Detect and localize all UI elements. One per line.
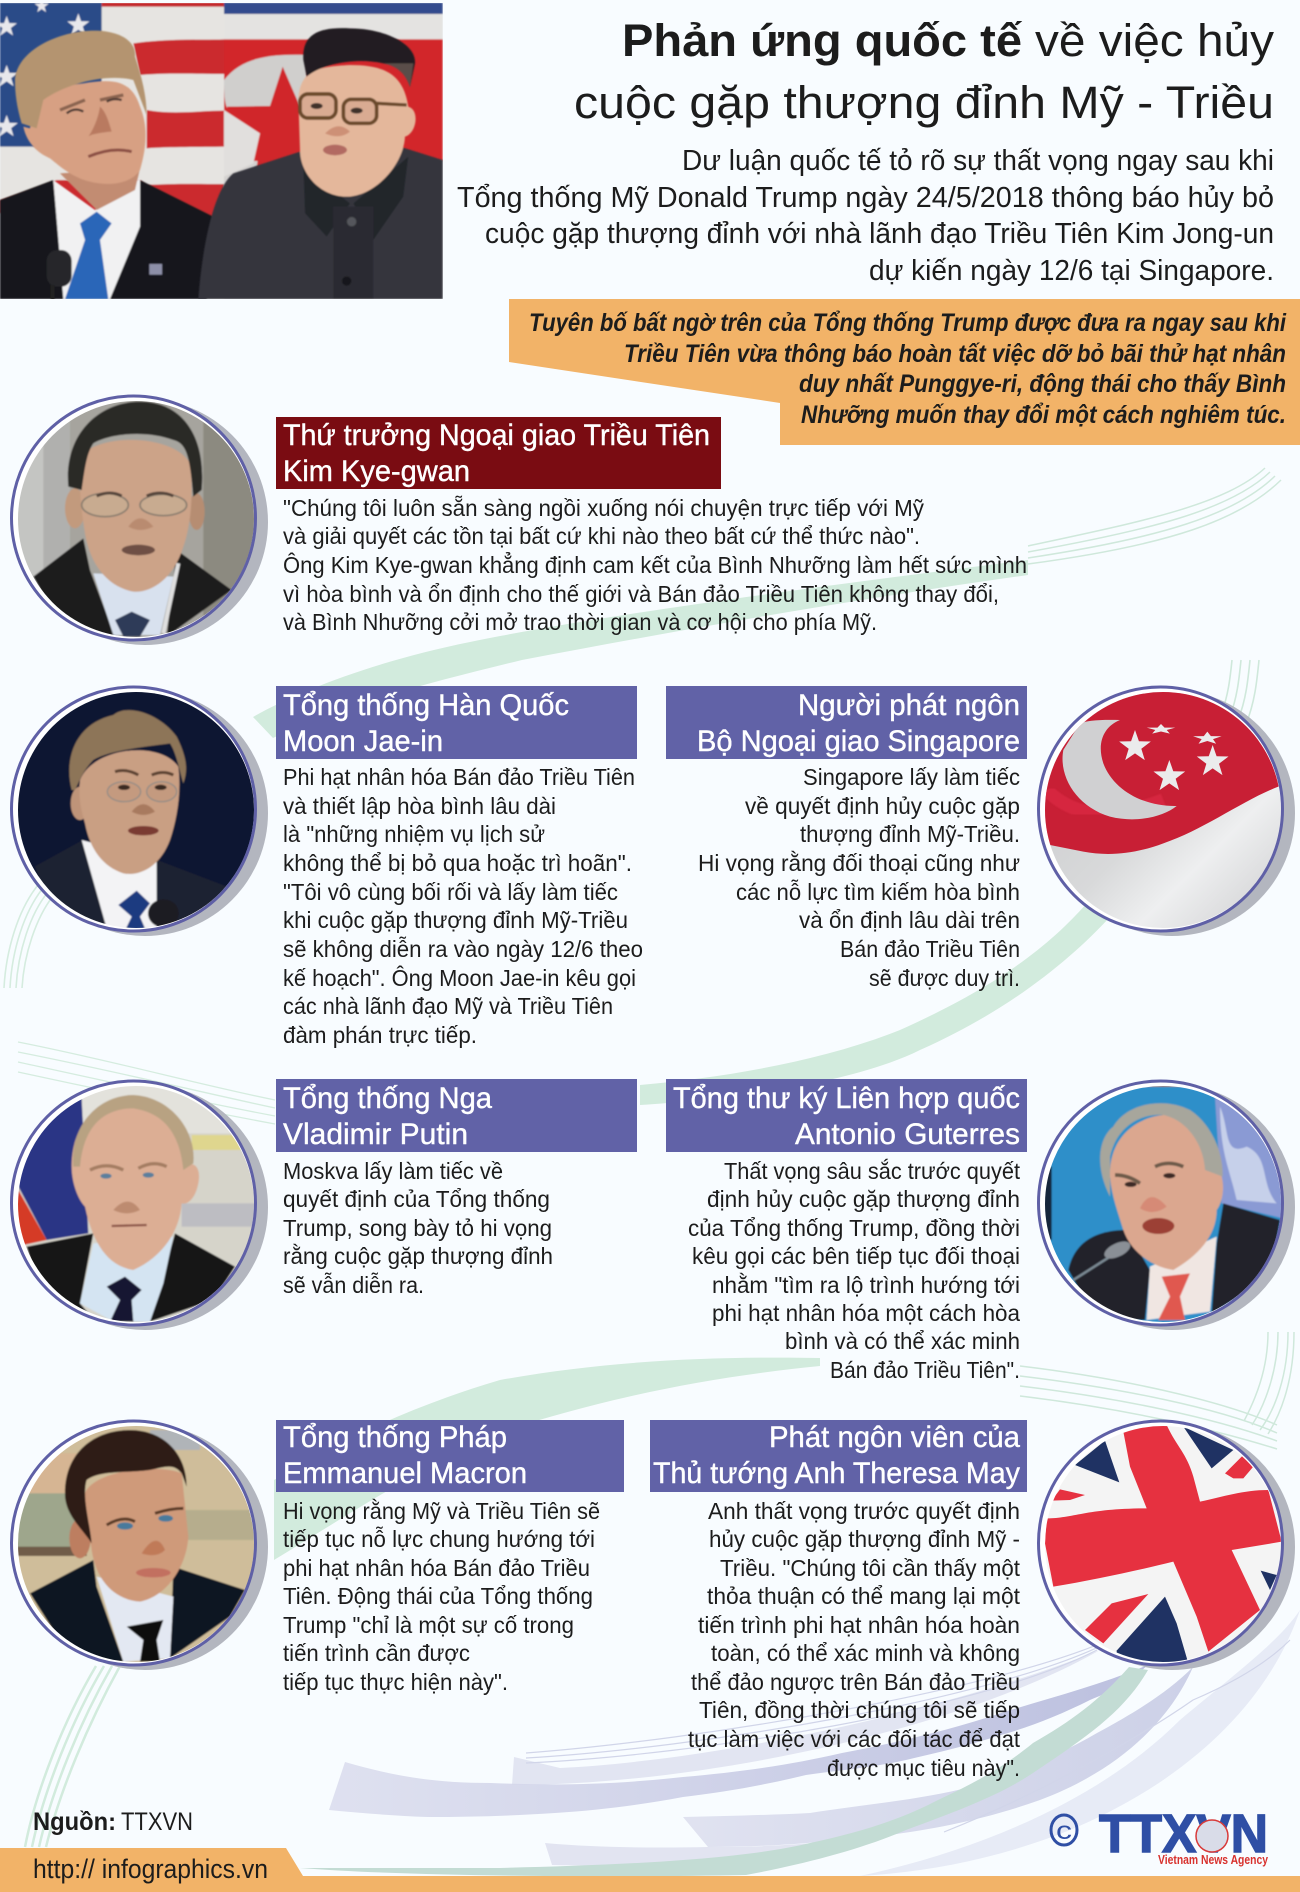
heading: Moon Jae-in — [276, 686, 637, 759]
text: Singapore statement: các nỗ lực tìm kiếm hòa bình — [736, 879, 1020, 905]
heading: Emmanuel Macron: Tổng thống Pháp — [283, 1421, 507, 1454]
heading: Vladimir Putin — [276, 1079, 637, 1152]
icon: UK flag — [1038, 1420, 1295, 1670]
text: Moon Jae-in statement: đàm phán trực tiếp. — [283, 1022, 477, 1048]
text: Singapore statement: về quyết định hủy cuộc gặp — [745, 793, 1020, 819]
heading: Emmanuel Macron — [276, 1420, 624, 1492]
text: Vladimir Putin statement: sẽ vẫn diễn ra. — [283, 1272, 424, 1298]
text: Moon Jae-in statement: khi cuộc gặp thượng đỉnh Mỹ-Triều — [283, 907, 628, 933]
title: Phản ứng quốc tế — [622, 15, 1023, 66]
portrait: Antonio Guterres — [1038, 1080, 1295, 1330]
intro text: Tổng thống Mỹ Donald Trump ngày 24/5/2018 thông báo hủy bỏ — [457, 182, 1274, 214]
text: Singapore statement: sẽ được duy trì. — [869, 965, 1020, 991]
text: Singapore statement: và ổn định lâu dài trên — [799, 907, 1020, 933]
text: Singapore statement: thượng đỉnh Mỹ-Triều. — [800, 821, 1020, 847]
text: Kim Kye-gwan statement — [283, 494, 1027, 635]
text: Singapore statement: Hi vọng rằng đối thoại cũng như — [698, 850, 1020, 876]
source: Nguồn: — [33, 1808, 116, 1836]
text: Kim Kye-gwan statement: "Chúng tôi luôn sẵn sàng ngồi xuống nói chuyện trực tiếp với Mỹ — [283, 494, 924, 521]
heading: Theresa May spokesperson: Thủ tướng Anh Theresa May — [653, 1457, 1020, 1490]
text: Moon Jae-in statement: là "những nhiệm vụ lịch sử — [283, 821, 545, 847]
text: Emmanuel Macron statement: Tiên. Động thái của Tổng thống — [283, 1583, 593, 1609]
text: Antonio Guterres statement: định hủy cuộc gặp thượng đỉnh — [707, 1186, 1020, 1212]
heading: Antonio Guterres: Tổng thư ký Liên hợp quốc — [673, 1082, 1020, 1115]
text: UK statement: thỏa thuận có thể mang lại một — [707, 1583, 1020, 1609]
heading: Kim Kye-gwan: Thứ trưởng Ngoại giao Triều Tiên — [283, 419, 710, 452]
text: Singapore statement — [698, 764, 1020, 991]
text: Vladimir Putin statement: quyết định của Tổng thống — [283, 1186, 550, 1212]
text: UK statement: tiến trình phi hạt nhân hóa hoàn — [698, 1612, 1020, 1638]
heading: Theresa May spokesperson: Phát ngôn viên của — [769, 1421, 1020, 1454]
header photo: Donald Trump and Kim Jong-un — [0, 0, 443, 300]
text: Emmanuel Macron statement: tiếp tục thực hiện này". — [283, 1669, 508, 1695]
heading: Kim Kye-gwan: Kim Kye-gwan — [283, 455, 470, 488]
source: TTXVN — [121, 1808, 193, 1836]
text: Vladimir Putin statement: rằng cuộc gặp thượng đỉnh — [283, 1243, 553, 1269]
text: Moon Jae-in statement: kế hoạch". Ông Moon Jae-in kêu gọi — [283, 964, 636, 991]
text: Antonio Guterres statement: kêu gọi các bên tiếp tục đối thoại — [692, 1243, 1020, 1269]
text: Emmanuel Macron statement: tiến trình cần được — [283, 1640, 470, 1666]
text: Moon Jae-in statement: "Tôi vô cùng bối rối và lấy làm tiếc — [283, 879, 618, 905]
heading: Vladimir Putin: Vladimir Putin — [283, 1118, 468, 1151]
heading: Antonio Guterres — [666, 1079, 1027, 1152]
logo: TTXVN: c — [1056, 1817, 1072, 1845]
text: UK statement: Anh thất vọng trước quyết định — [708, 1498, 1020, 1524]
text: Antonio Guterres statement: của Tổng thống Trump, đồng thời — [688, 1215, 1020, 1241]
heading: Singapore spokesperson — [666, 686, 1027, 759]
heading: Moon Jae-in: Tổng thống Hàn Quốc — [283, 689, 569, 722]
heading: Antonio Guterres: Antonio Guterres — [795, 1118, 1020, 1151]
icon: Singapore flag — [1038, 687, 1295, 936]
text: Moon Jae-in statement: các nhà lãnh đạo Mỹ và Triều Tiên — [283, 993, 613, 1019]
text: Singapore statement: Singapore lấy làm tiếc — [803, 764, 1020, 790]
text: UK statement — [688, 1498, 1020, 1781]
text: UK statement: hủy cuộc gặp thượng đỉnh Mỹ - — [709, 1526, 1020, 1552]
text: Emmanuel Macron statement: Hi vọng rằng Mỹ và Triều Tiên sẽ — [283, 1498, 600, 1524]
title: về việc hủy — [1035, 15, 1275, 66]
text: Kim Kye-gwan statement: và giải quyết các tồn tại bất cứ khi nào theo bất cứ thể thức nào". — [283, 523, 920, 549]
text: Vladimir Putin statement: Moskva lấy làm tiếc về — [283, 1158, 503, 1184]
text: Emmanuel Macron statement — [283, 1498, 600, 1695]
text: Singapore statement: Bán đảo Triều Tiên — [840, 936, 1020, 962]
title — [574, 15, 1275, 128]
text: Moon Jae-in statement: Phi hạt nhân hóa Bán đảo Triều Tiên — [283, 764, 635, 790]
text: Kim Kye-gwan statement: Ông Kim Kye-gwan khẳng định cam kết của Bình Nhưỡng làm hết sức mình — [283, 550, 1027, 578]
portrait: Vladimir Putin — [12, 1080, 268, 1330]
portrait: Moon Jae-in — [12, 687, 268, 936]
text: Emmanuel Macron statement: Trump "chỉ là một sự cố trong — [283, 1612, 574, 1638]
footer bar with URL: http:// infographics.vn — [33, 1854, 268, 1884]
text: Antonio Guterres statement — [688, 1158, 1021, 1383]
text: Moon Jae-in statement — [283, 764, 643, 1048]
text: Antonio Guterres statement: phi hạt nhân hóa một cách hòa — [712, 1300, 1021, 1326]
text: Antonio Guterres statement: Thất vọng sâu sắc trước quyết — [724, 1158, 1020, 1184]
logo: TTXVN: TTXVN — [1099, 1804, 1268, 1864]
text: UK statement: tục làm việc với các đối tác để đạt — [688, 1726, 1020, 1752]
figure: Kim Jong-un — [198, 28, 443, 299]
text: UK statement: được mục tiêu này". — [827, 1755, 1020, 1781]
text: Vladimir Putin statement: Trump, song bày tỏ hi vọng — [283, 1215, 552, 1241]
text: UK statement: thể đảo ngược trên Bán đảo Triều — [691, 1669, 1020, 1695]
text: UK statement: Tiên, đồng thời chúng tôi sẽ tiếp — [699, 1697, 1020, 1723]
heading: Singapore spokesperson: Người phát ngôn — [798, 689, 1020, 722]
intro text — [457, 145, 1274, 287]
intro text: Dư luận quốc tế tỏ rõ sự thất vọng ngay sau khi — [682, 145, 1274, 177]
heading: Emmanuel Macron: Emmanuel Macron — [283, 1457, 527, 1490]
logo: TTXVN: Vietnam News Agency — [1158, 1852, 1269, 1867]
callout: orange note — [509, 299, 1300, 445]
text: Antonio Guterres statement: nhằm "tìm ra lộ trình hướng tới — [712, 1272, 1020, 1298]
text: Moon Jae-in statement: và thiết lập hòa bình lâu dài — [283, 793, 556, 819]
text: Antonio Guterres statement: Bán đảo Triều Tiên". — [830, 1357, 1020, 1383]
portrait: Emmanuel Macron — [12, 1421, 268, 1670]
text: UK statement: Triều. "Chúng tôi cần thấy một — [720, 1555, 1020, 1581]
heading: Kim Kye-gwan — [276, 417, 721, 489]
text: Antonio Guterres statement: bình và có thể xác minh — [785, 1328, 1020, 1354]
figure: Donald Trump — [0, 31, 213, 300]
heading: Singapore spokesperson: Bộ Ngoại giao Singapore — [697, 725, 1020, 758]
source — [33, 1808, 193, 1836]
intro text: cuộc gặp thượng đỉnh với nhà lãnh đạo Triều Tiên Kim Jong-un — [485, 218, 1274, 250]
text: Vladimir Putin statement — [283, 1158, 553, 1298]
text: Emmanuel Macron statement: phi hạt nhân hóa Bán đảo Triều — [283, 1555, 590, 1581]
text: Kim Kye-gwan statement: vì hòa bình và ổn định cho thế giới và Bán đảo Triều Tiên không thay đổi, — [283, 581, 999, 607]
heading: Theresa May spokesperson — [650, 1420, 1027, 1492]
portrait: Kim Kye-gwan — [12, 396, 268, 645]
text: UK statement: toàn, có thể xác minh và không — [711, 1640, 1020, 1666]
title: cuộc gặp thượng đỉnh Mỹ - Triều — [574, 77, 1274, 128]
text: Moon Jae-in statement: không thể bị bỏ qua hoặc trì hoãn". — [283, 850, 632, 876]
intro text: dự kiến ngày 12/6 tại Singapore. — [869, 255, 1274, 287]
text: Moon Jae-in statement: sẽ không diễn ra vào ngày 12/6 theo — [283, 936, 643, 962]
heading: Moon Jae-in: Moon Jae-in — [283, 725, 443, 758]
footer bar with URL — [0, 1848, 1300, 1892]
text: Emmanuel Macron statement: tiếp tục nỗ lực chung hướng tới — [283, 1526, 595, 1552]
background swooshes — [4, 468, 1300, 1876]
text: Kim Kye-gwan statement: và Bình Nhưỡng cởi mở trao thời gian và cơ hội cho phía Mỹ. — [283, 609, 877, 635]
heading: Vladimir Putin: Tổng thống Nga — [283, 1082, 492, 1115]
